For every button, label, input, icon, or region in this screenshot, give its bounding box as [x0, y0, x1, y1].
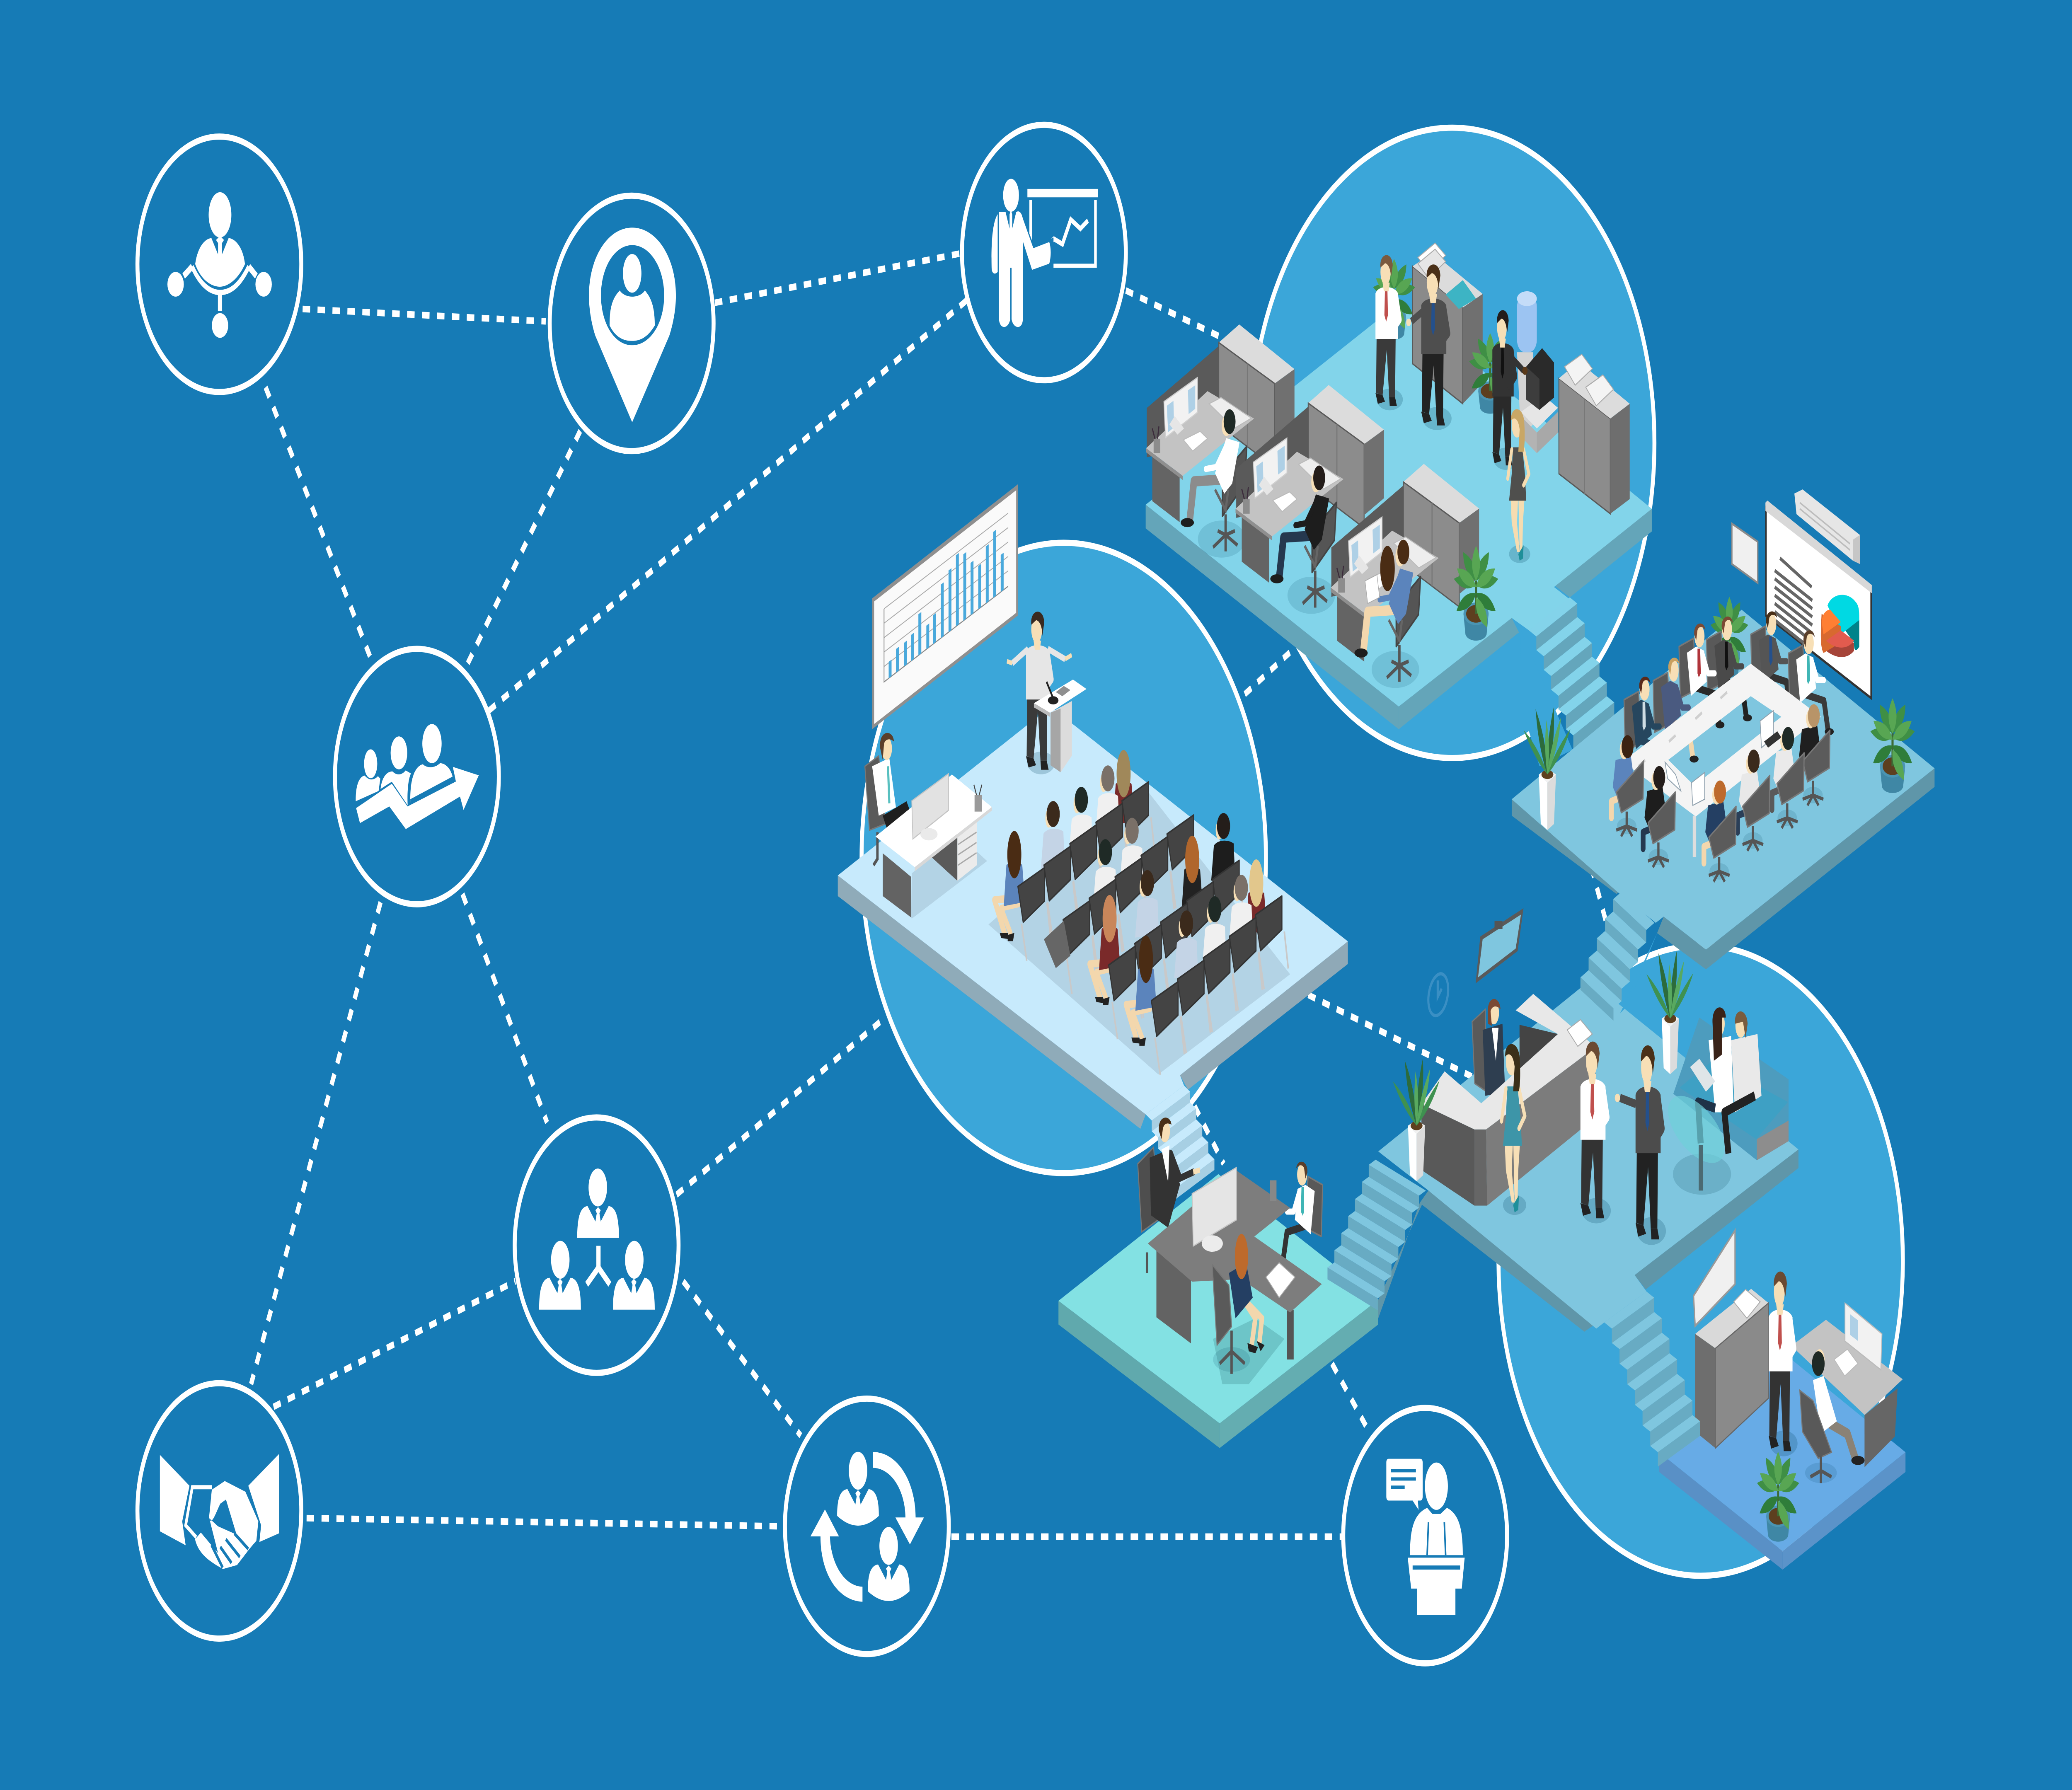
- person: standing man: [1769, 1272, 1798, 1456]
- icon: plant near cooler: [1469, 333, 1512, 414]
- seated audience row 4: [1126, 859, 1288, 1075]
- trainer desk with monitor: [876, 774, 992, 917]
- person: receptionist: [1472, 999, 1505, 1096]
- seated audience row 3: [1090, 813, 1246, 1039]
- icon: map pin with person: [589, 227, 676, 422]
- lectern with microphone: [1034, 680, 1087, 772]
- stairs: work office to conference room: [1529, 597, 1614, 749]
- panel: blue manager office: [1659, 1230, 1905, 1570]
- office desk and monitor: [1148, 1168, 1322, 1359]
- person: customer in teal dress: [1501, 1044, 1526, 1215]
- node: speaker at lectern: [1343, 1408, 1507, 1663]
- floor: blue room: [1659, 1353, 1905, 1570]
- stairs: training room to teal office: [1146, 1086, 1214, 1199]
- panel: reception lobby: [1378, 908, 1798, 1332]
- node: central person with connected dots: [138, 137, 301, 392]
- filing cabinet right: [1559, 354, 1630, 514]
- person: man in grey suit: [1615, 1045, 1666, 1245]
- person: seated worker: [1800, 1349, 1864, 1483]
- air conditioner: [1794, 489, 1860, 564]
- large circle behind reception and manager room: [1498, 946, 1903, 1576]
- large circle behind work office: [1250, 128, 1654, 758]
- people on near side of table: [1612, 704, 1830, 882]
- icon: tall plant left: [1392, 1058, 1442, 1181]
- panel: training room: [838, 484, 1348, 1129]
- chart: 3D pie: [1821, 595, 1859, 657]
- seated audience row 2: [1044, 815, 1200, 994]
- person: man in white shirt: [1581, 1042, 1611, 1224]
- icon: speaker with speech bubble: [1386, 1459, 1464, 1615]
- presentation screen with pie chart: [1765, 501, 1872, 698]
- U-shaped conference table: [1622, 664, 1821, 857]
- icon: three people with rising arrow: [356, 724, 479, 829]
- icon: person hub: [167, 192, 272, 338]
- light triangle under upper stairs: [1520, 630, 1573, 766]
- reception desk: [1421, 994, 1595, 1206]
- node: presenter with chart: [962, 125, 1126, 380]
- icon: two people with cycle arrows: [811, 1452, 924, 1602]
- panel: open plan work office: [1146, 243, 1652, 729]
- person: seated woman with red hair: [1212, 1234, 1265, 1374]
- wall screen: [1476, 908, 1523, 983]
- person: man with coffee: [1492, 310, 1527, 470]
- coffee table with machine: [1521, 348, 1558, 453]
- icon: tall plant left: [1523, 707, 1573, 830]
- stairs: reception to teal office: [1327, 1160, 1428, 1318]
- cubicle desk with worker in black: [1236, 385, 1384, 614]
- sofa with couple: [1673, 1007, 1789, 1160]
- chart: rising bars: [884, 513, 1008, 682]
- panel: conference room: [1512, 489, 1934, 969]
- panel: teal meeting office: [1058, 1174, 1378, 1448]
- floor: training room: [838, 706, 1348, 1129]
- icon: tall plant right: [1646, 951, 1695, 1074]
- glass coffee table: [1661, 1082, 1732, 1195]
- person: seated secretary: [865, 733, 912, 865]
- icon: plant right: [1870, 698, 1915, 793]
- floor: teal room: [1058, 1174, 1378, 1448]
- cabinet and wall picture: [1694, 1230, 1769, 1448]
- floor: reception: [1378, 980, 1798, 1332]
- person: seated man in suit: [1138, 1118, 1200, 1273]
- cubicle desk with worker in white shirt: [1146, 324, 1295, 558]
- large circle behind training room: [862, 543, 1266, 1173]
- clock on wall: [1425, 970, 1452, 1020]
- people on far side of table: [1624, 611, 1834, 781]
- person: seated man in white shirt: [1277, 1162, 1323, 1267]
- node: team growth arrow: [335, 649, 499, 904]
- icon: plant behind table: [1710, 597, 1749, 677]
- icon: handshake: [160, 1454, 279, 1569]
- node: organisation hierarchy: [515, 1118, 678, 1373]
- icon: presenter at board: [992, 179, 1098, 327]
- floor: work office: [1146, 303, 1652, 729]
- water cooler: [1517, 291, 1537, 441]
- floor: conference room: [1512, 610, 1934, 969]
- teal office furniture and people: [1138, 1118, 1323, 1374]
- person: man in grey suit: [1406, 264, 1452, 430]
- icon: plant: [1757, 1451, 1800, 1542]
- icon: plant front: [1453, 546, 1499, 641]
- icon: three people hierarchy: [539, 1168, 655, 1310]
- dotted network connectors: [251, 253, 1607, 1537]
- person: man in white shirt: [1375, 255, 1403, 410]
- stairs: conference room to reception: [1581, 892, 1657, 1021]
- filing cabinet with papers: [1413, 243, 1483, 404]
- node: location pin: [550, 196, 714, 451]
- person: speaker: [1007, 612, 1072, 774]
- desk with monitor: [1791, 1303, 1903, 1467]
- node: handshake: [138, 1383, 301, 1639]
- seated audience row 1: [995, 750, 1155, 961]
- whiteboard with bar chart: [872, 484, 1018, 729]
- node: people cycle: [785, 1398, 949, 1654]
- cubicle desk with woman reading: [1331, 464, 1479, 688]
- stairs: reception to manager room: [1604, 1292, 1700, 1467]
- person: woman in grey dress: [1508, 409, 1530, 563]
- icon: plant behind man: [1372, 259, 1416, 340]
- wall picture: [1732, 524, 1758, 583]
